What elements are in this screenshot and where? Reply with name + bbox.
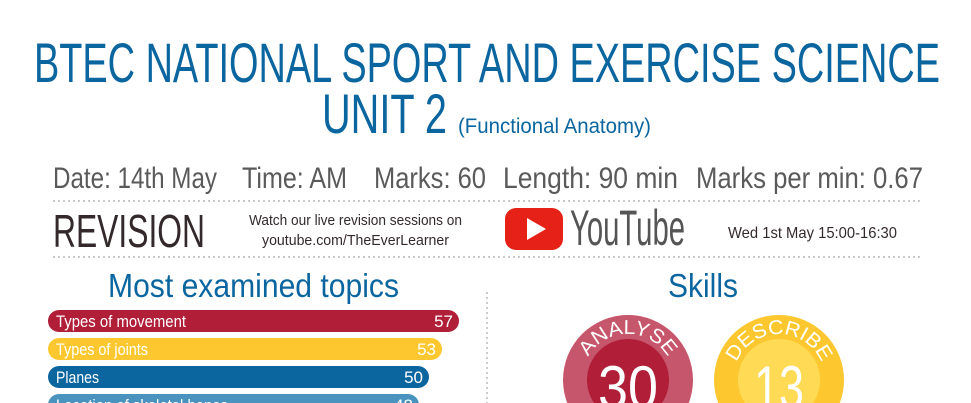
skill: analyse: ANALYSE	[580, 320, 678, 357]
revision text: youtube.com/TheEverLearner	[262, 232, 449, 249]
title	[34, 31, 940, 145]
bar chart: Planes	[56, 368, 99, 387]
bar chart: Types of joints	[56, 340, 148, 359]
exam info row	[53, 162, 923, 195]
exam info row: Marks: 60	[374, 162, 486, 195]
bar chart	[48, 310, 459, 403]
skill: describe	[714, 315, 844, 403]
exam info row: Time: AM	[242, 162, 347, 195]
bar chart: 53	[417, 340, 436, 359]
revision heading: REVISION	[53, 205, 205, 257]
bar chart: 50	[404, 368, 423, 387]
heading: skills: Skills	[668, 267, 738, 304]
bar chart: 57	[434, 312, 453, 331]
exam info row: Length: 90 min	[503, 162, 678, 195]
exam info row: Date: 14th May	[53, 162, 217, 195]
session date: Wed 1st May 15:00-16:30	[728, 225, 897, 242]
heading: most examined topics: Most examined topics	[108, 267, 399, 304]
skill: describe: DESCRIBE	[725, 320, 833, 362]
exam info row: Marks per min: 0.67	[696, 162, 923, 195]
revision text	[249, 212, 462, 249]
title: (Functional Anatomy)	[458, 115, 651, 138]
icon: youtube logo	[505, 200, 685, 256]
title: UNIT 2	[322, 82, 447, 145]
skill: analyse	[563, 315, 693, 403]
bar chart: Types of movement	[56, 312, 186, 331]
icon: youtube logo: YouTube	[570, 200, 685, 256]
revision text: Watch our live revision sessions on	[249, 212, 462, 229]
